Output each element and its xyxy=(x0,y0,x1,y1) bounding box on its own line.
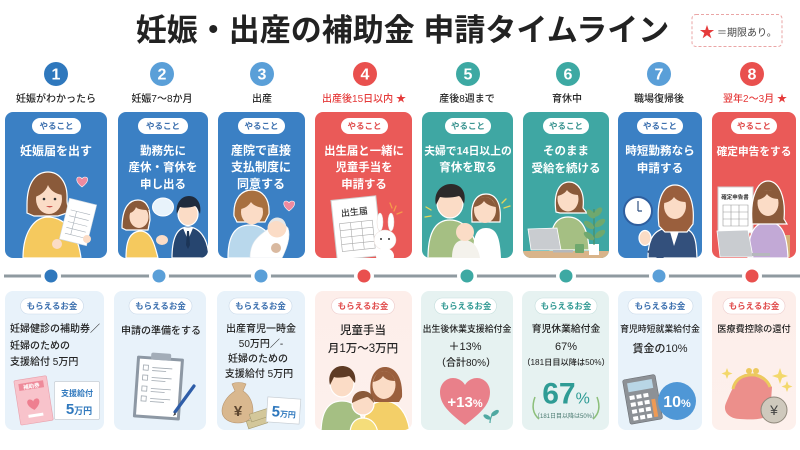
benefit text: 67% xyxy=(555,341,577,353)
benefit text xyxy=(620,323,700,355)
panel: step 4 benefit xyxy=(315,291,412,434)
step 6 number: 6 xyxy=(564,66,573,84)
illustration: 67% with laurels: 67% xyxy=(542,378,590,410)
step 5 number xyxy=(456,62,480,86)
legend: star means deadline: ＝期限あり。 xyxy=(717,27,777,39)
step 1 timing: 妊娠がわかったら xyxy=(16,92,96,105)
badge: もらえるお金: もらえるお金 xyxy=(235,301,286,311)
benefit text xyxy=(328,323,398,355)
action text: 同意する xyxy=(237,177,285,191)
benefit text xyxy=(10,322,100,368)
step 2 timing: 妊娠7〜8か月 xyxy=(131,92,193,105)
action text: 受給を続ける xyxy=(532,161,600,175)
illustration: voucher booklet and amount card: 補助券 xyxy=(23,381,41,391)
title: 妊娠・出産の補助金 申請タイムライン xyxy=(136,13,669,48)
step 1 number xyxy=(44,62,68,86)
action text: 申し出る xyxy=(140,177,186,191)
benefit text: 児童手当 xyxy=(340,323,386,337)
action text: 支払制度に xyxy=(231,159,291,174)
panel: step 2 action xyxy=(118,112,209,258)
badge: やること xyxy=(32,118,81,134)
illustration: couple with baby xyxy=(425,184,510,258)
badge: もらえるお金: もらえるお金 xyxy=(27,301,78,311)
illustration: woman talking to boss xyxy=(122,196,209,258)
badge: もらえるお金: もらえるお金 xyxy=(338,301,389,311)
step 4 number: 4 xyxy=(361,66,370,84)
badge: もらえるお金: もらえるお金 xyxy=(135,301,186,311)
benefit text: 出生後休業支援給付金 xyxy=(423,323,511,334)
step 8 number: 8 xyxy=(748,66,757,84)
badge: やること xyxy=(341,118,388,134)
panel: step 3 action xyxy=(218,112,305,258)
action text: 申請する xyxy=(637,161,683,175)
benefit text: 妊婦のための xyxy=(10,339,70,352)
benefit text: 申請の準備をする xyxy=(121,324,201,337)
benefit text: 妊婦のための xyxy=(228,352,288,365)
action text: 勤務先に xyxy=(140,144,186,158)
benefit text xyxy=(225,322,296,380)
illustration: 67% with laurels: （181日目以降は50%） xyxy=(534,412,598,420)
step 8 number xyxy=(740,62,764,86)
badge: もらえるお金: もらえるお金 xyxy=(729,301,780,311)
action text: そのまま xyxy=(543,144,589,158)
step 1 number: 1 xyxy=(52,66,61,84)
action text: 妊娠届を出す xyxy=(20,143,92,158)
illustration: woman doing tax return xyxy=(717,181,790,258)
panel: step 4 action xyxy=(315,112,412,264)
step 3 number: 3 xyxy=(258,66,267,84)
timeline line and nodes xyxy=(4,266,800,286)
step 4 number xyxy=(353,62,377,86)
action text xyxy=(231,142,291,191)
benefit text xyxy=(423,323,511,369)
benefit text: （181日目以降は50%） xyxy=(522,357,610,367)
badge: やること: やること xyxy=(146,121,180,131)
panel: step 5 action xyxy=(422,112,513,258)
illustration: mother holding newborn xyxy=(228,190,295,258)
badge: やること: やること xyxy=(549,121,583,131)
step 7 number xyxy=(647,62,671,86)
action text: 時短勤務なら xyxy=(625,144,695,158)
badge: やること xyxy=(238,118,285,134)
badge: やること xyxy=(731,118,777,134)
step 6 timing: 育休中 xyxy=(552,92,582,105)
step 8 timing: 翌年2〜3月 ★ xyxy=(723,92,787,105)
legend: star means deadline: ★ xyxy=(699,24,715,41)
panel: step 6 benefit xyxy=(522,291,610,430)
illustration: voucher booklet and amount card: 5万円 xyxy=(66,401,92,418)
step 2 number xyxy=(150,62,174,86)
action text: 確定申告をする xyxy=(717,145,791,158)
illustration: voucher booklet and amount card xyxy=(14,376,99,425)
action text xyxy=(128,144,198,191)
action text xyxy=(532,144,600,175)
panel: step 1 action xyxy=(5,112,107,258)
action text xyxy=(424,144,512,174)
badge: やること xyxy=(138,118,188,134)
benefit text: 月1万〜3万円 xyxy=(328,342,398,355)
badge: やること xyxy=(445,118,491,134)
panel: step 6 action xyxy=(523,112,609,259)
legend: star means deadline xyxy=(692,14,782,46)
action text: 児童手当を xyxy=(336,160,392,174)
action text xyxy=(324,144,404,191)
illustration: calculator and 10% badge: 10% xyxy=(663,394,691,411)
badge: やること: やること xyxy=(737,121,771,131)
illustration: birth certificate and rabbit xyxy=(331,196,402,264)
badge: やること: やること xyxy=(451,121,485,131)
illustration: heart +13% and sprout: +13% xyxy=(447,394,483,411)
illustration: woman holding form xyxy=(23,172,97,258)
action text: 育休を取る xyxy=(439,160,497,174)
benefit text: 賃金の10% xyxy=(632,341,688,355)
badge: やること: やること xyxy=(39,121,74,131)
benefit text: 出産育児一時金 xyxy=(226,322,296,335)
illustration: coin purse and yen coin: ¥ xyxy=(769,402,778,418)
badge: やること xyxy=(637,118,683,134)
illustration: woman at laptop with plant xyxy=(523,182,609,259)
action text xyxy=(625,144,695,175)
badge: やること xyxy=(543,118,589,134)
badge: やること: やること xyxy=(347,121,382,131)
benefit text: 育児時短就業給付金 xyxy=(620,323,700,334)
action text: 産休・育休を xyxy=(128,160,198,174)
benefit text: ＋13% xyxy=(448,341,482,353)
step 6 number xyxy=(556,62,580,86)
badge: やること: やること xyxy=(643,121,677,131)
benefit text: 支援給付 5万円 xyxy=(225,367,293,380)
step 4 timing: 出産後15日以内 ★ xyxy=(322,92,406,105)
badge: やること: やること xyxy=(244,121,279,131)
panel: step 1 benefit xyxy=(5,291,104,430)
panel: step 2 benefit xyxy=(114,291,206,430)
illustration: money bag and bills xyxy=(222,382,301,429)
benefit text: 支援給付 5万円 xyxy=(10,355,78,368)
illustration: birth certificate and rabbit: 出生届 xyxy=(340,205,368,218)
benefit text: 50万円／- xyxy=(239,338,283,350)
step 5 number: 5 xyxy=(464,66,473,84)
step 3 number xyxy=(250,62,274,86)
benefit text xyxy=(522,322,610,367)
action text: 申請する xyxy=(341,177,387,191)
panel: step 7 benefit xyxy=(618,291,702,430)
action text: 夫婦で14日以上の xyxy=(424,144,512,158)
illustration: clipboard and pen xyxy=(133,351,194,421)
panel: step 8 action xyxy=(712,112,796,258)
step 3 timing: 出産 xyxy=(252,92,272,105)
step 7 timing: 職場復帰後 xyxy=(634,92,684,105)
benefit text: 育児休業給付金 xyxy=(532,322,600,335)
step 5 timing: 産後8週まで xyxy=(439,92,495,105)
illustration: 67% with laurels xyxy=(533,378,599,420)
badge: もらえるお金: もらえるお金 xyxy=(441,301,492,311)
step 7 number: 7 xyxy=(655,66,664,84)
benefit text: 医療費控除の還付 xyxy=(717,323,791,334)
benefit text: 妊婦健診の補助券／ xyxy=(10,322,100,335)
illustration: family of three xyxy=(321,366,410,434)
panel: step 8 benefit xyxy=(712,291,796,430)
action text: 出生届と一緒に xyxy=(324,144,404,158)
action text: 産院で直接 xyxy=(231,142,291,158)
illustration: woman doing tax return: 確定申告書 xyxy=(721,193,749,201)
illustration: voucher booklet and amount card: 支援給付 xyxy=(61,388,93,398)
step 2 number: 2 xyxy=(158,66,167,84)
badge: もらえるお金 xyxy=(332,298,394,314)
benefit text: （合計80%） xyxy=(436,356,496,369)
badge: もらえるお金: もらえるお金 xyxy=(541,301,592,311)
panel: step 7 action xyxy=(618,112,702,258)
panel: step 5 benefit xyxy=(421,291,513,430)
illustration: working woman and clock xyxy=(624,185,697,258)
badge: もらえるお金: もらえるお金 xyxy=(635,301,686,311)
panel: step 3 benefit xyxy=(217,291,305,430)
illustration: money bag and bills: ¥ xyxy=(234,403,243,420)
illustration: money bag and bills: 5万円 xyxy=(271,403,297,422)
